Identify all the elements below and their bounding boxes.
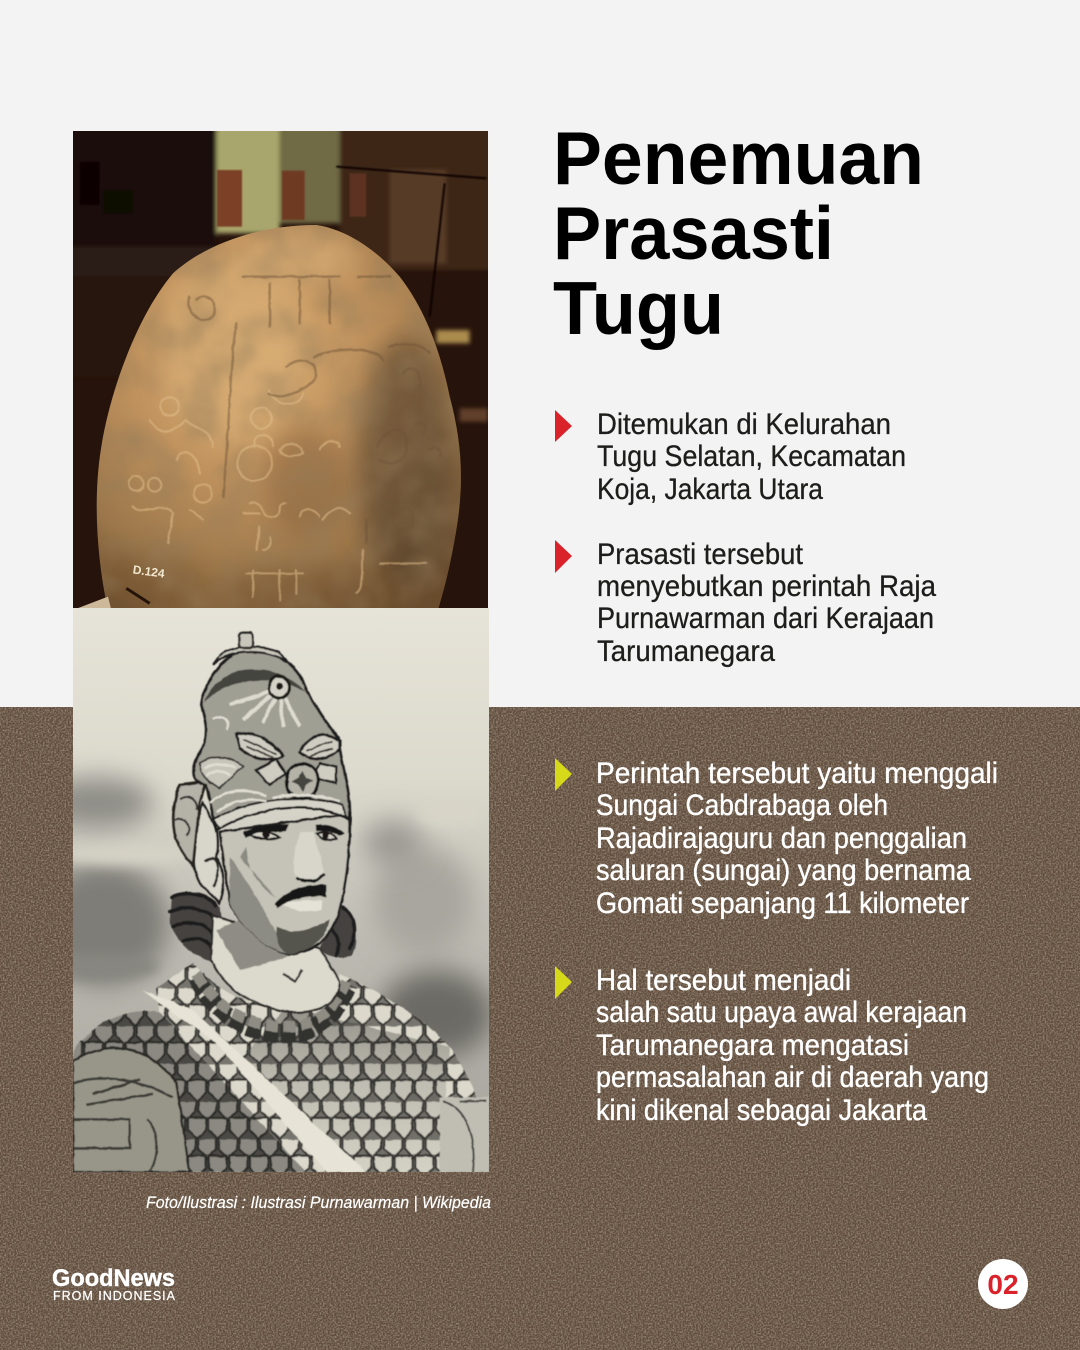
neck <box>211 916 340 1012</box>
text block: bullet 4: permasalahan air di daerah yang <box>596 1061 989 1094</box>
text block: bullet 3: Rajadirajaguru dan penggalian <box>596 822 967 855</box>
illustration: portrait of Purnawarman <box>36 608 493 1172</box>
text block: bullet 2: menyebutkan perintah Raja <box>597 570 937 603</box>
text block: bullet 3: Sungai Cabdrabaga oleh <box>596 789 888 822</box>
icon: red triangle <box>555 410 572 442</box>
clouds <box>36 777 493 1058</box>
logo: GoodNews from Indonesia: GoodNews <box>52 1265 175 1292</box>
text block: bullet 4: Tarumanegara mengatasi <box>596 1029 909 1062</box>
catalogue number on stone: D.124 <box>132 562 166 581</box>
text block: bullet 4: kini dikenal sebagai Jakarta <box>596 1094 928 1127</box>
bullet 1: location of discovery <box>555 408 906 506</box>
exhibits in the background <box>80 162 486 317</box>
text block: bullet 3: Gomati sepanjang 11 kilometer <box>596 887 969 920</box>
moustache and mouth <box>275 885 326 908</box>
page background: light upper area <box>0 0 1080 707</box>
collar scales <box>196 978 350 1034</box>
title: Tugu <box>553 266 724 350</box>
text block: bullet 1: Tugu Selatan, Kecamatan <box>597 440 906 473</box>
text block: bullet 2: Tarumanegara <box>597 635 776 668</box>
text block: bullet 4: Hal tersebut menjadi <box>596 964 851 997</box>
icon: red triangle <box>555 540 572 573</box>
stone body <box>96 225 461 608</box>
bullet 2: royal order <box>555 538 937 668</box>
text block: bullet 3 <box>596 757 998 920</box>
title: Penemuan <box>553 116 924 200</box>
inscription carvings <box>129 390 426 600</box>
text block: bullet 2: Purnawarman dari Kerajaan <box>597 602 934 635</box>
photo credit caption: Foto/Ilustrasi : Ilustrasi Purnawarman | Wikipedia <box>146 1193 491 1212</box>
text block: bullet 1: Koja, Jakarta Utara <box>597 473 824 506</box>
title <box>553 116 924 350</box>
page number badge <box>978 1259 1028 1309</box>
text block: bullet 3: saluran (sungai) yang bernama <box>596 854 972 887</box>
eyes and brows <box>243 824 345 837</box>
armour body <box>73 963 489 1172</box>
sash <box>143 990 366 1172</box>
ear <box>193 803 223 903</box>
logo: GoodNews from Indonesia: FROM INDONESIA <box>53 1289 176 1303</box>
page background: textured brown lower area <box>0 707 1080 1350</box>
face <box>220 814 350 954</box>
page number badge: 02 <box>987 1269 1019 1300</box>
text block: bullet 4 <box>596 964 989 1127</box>
icon: yellow triangle <box>555 758 572 791</box>
bullet 4: early water management <box>555 964 989 1127</box>
title: Prasasti <box>553 191 834 275</box>
icon: yellow triangle <box>555 966 572 999</box>
photo: Prasasti Tugu inscribed stone <box>66 123 495 617</box>
bullet 3: the canal digging order <box>555 757 998 920</box>
text block: bullet 2 <box>597 538 937 668</box>
text block: bullet 2: Prasasti tersebut <box>597 538 803 571</box>
hair <box>170 892 356 962</box>
text block: bullet 1: Ditemukan di Kelurahan <box>597 408 891 441</box>
text block: bullet 3: Perintah tersebut yaitu menggali <box>596 757 998 790</box>
text block: bullet 4: salah satu upaya awal kerajaan <box>596 996 967 1029</box>
helmet <box>173 633 350 865</box>
text block: bullet 1 <box>597 408 906 506</box>
